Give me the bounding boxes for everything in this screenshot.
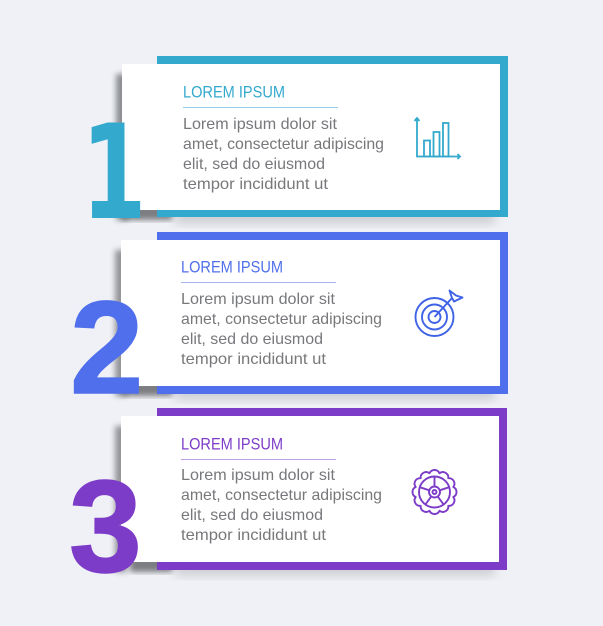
body text: elit, sed do eiusmod — [183, 156, 325, 173]
body text: elit, sed do eiusmod — [181, 507, 323, 524]
heading: LOREM IPSUM — [183, 82, 285, 102]
white card — [121, 240, 500, 386]
panel: step 3 — [69, 408, 507, 600]
body text — [181, 291, 382, 368]
heading: LOREM IPSUM — [181, 258, 283, 276]
icon: bar chart — [414, 118, 460, 159]
panel: step 1 — [81, 56, 508, 249]
body text: amet, consectetur adipiscing — [181, 311, 382, 328]
body text — [183, 116, 384, 193]
body text — [181, 467, 382, 544]
white card — [122, 64, 500, 210]
body text: amet, consectetur adipiscing — [183, 136, 384, 153]
body text: tempor incididunt ut — [183, 176, 329, 193]
heading: LOREM IPSUM — [181, 434, 283, 454]
body text: Lorem ipsum dolor sit — [183, 116, 338, 133]
frame — [157, 408, 507, 570]
body text: amet, consectetur adipiscing — [181, 487, 382, 504]
white card — [121, 416, 499, 562]
body text: elit, sed do eiusmod — [181, 331, 323, 348]
panel: step 2 — [70, 232, 508, 421]
body text: Lorem ipsum dolor sit — [181, 291, 336, 308]
icon: gear — [412, 470, 457, 514]
icon: target — [416, 290, 462, 336]
body text: tempor incididunt ut — [181, 527, 327, 544]
body text: Lorem ipsum dolor sit — [181, 467, 336, 484]
frame — [157, 56, 508, 217]
number 3: 3 — [69, 452, 142, 600]
frame — [157, 232, 508, 394]
body text: tempor incididunt ut — [181, 351, 327, 368]
number 2: 2 — [70, 274, 143, 421]
number 1: 1 — [81, 96, 147, 249]
